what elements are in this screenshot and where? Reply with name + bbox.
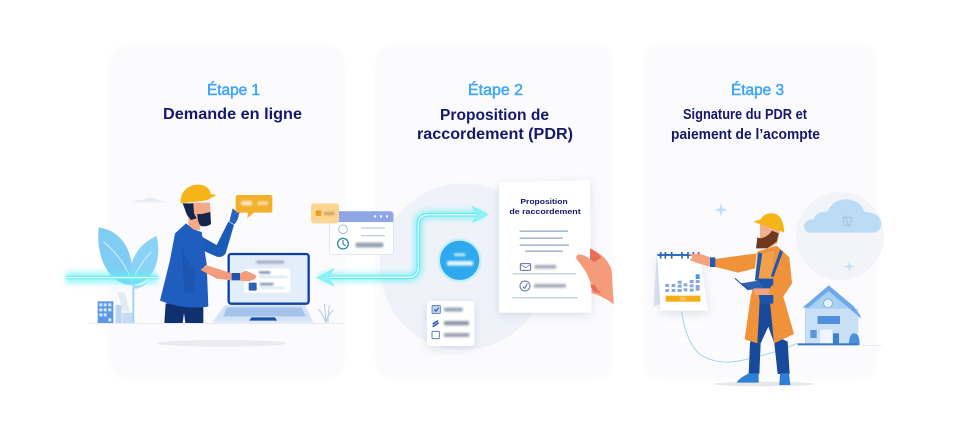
panel: step 3 card bbox=[642, 44, 878, 380]
arrow: cyan line left bbox=[66, 272, 158, 283]
illustration: step 1 scene bbox=[66, 185, 345, 347]
icon: buildings bbox=[98, 293, 132, 323]
icon: reeds bbox=[319, 304, 333, 323]
speech bubble bbox=[236, 195, 272, 218]
document: de raccordement bbox=[509, 207, 581, 216]
boots bbox=[737, 373, 790, 385]
hat bbox=[753, 213, 784, 233]
heading: step 1: Demande en ligne bbox=[163, 106, 302, 123]
head bbox=[192, 203, 211, 225]
hand back bbox=[589, 248, 614, 304]
background circle bbox=[380, 183, 547, 350]
illustration: step 3 scene bbox=[653, 192, 884, 386]
heading: step 2: Étape 2 bbox=[468, 80, 523, 99]
heading: step 1: Étape 1 bbox=[207, 80, 260, 99]
hand bbox=[576, 248, 603, 293]
cable bbox=[682, 312, 797, 362]
heading: step 1 bbox=[163, 80, 302, 123]
shirt and overalls bbox=[757, 251, 774, 280]
calendar bbox=[653, 252, 708, 311]
ground shadow bbox=[157, 340, 287, 347]
ground shadow bbox=[714, 382, 814, 386]
laptop bbox=[213, 254, 313, 323]
panel: step 1 card bbox=[108, 44, 345, 380]
pointing arm bbox=[714, 253, 757, 273]
heading: step 3: Étape 3 bbox=[731, 80, 784, 99]
tablet bbox=[741, 281, 764, 290]
small cloud bbox=[132, 197, 166, 202]
ground line bbox=[88, 322, 345, 325]
cloud circle bbox=[796, 192, 884, 280]
status window bbox=[329, 211, 393, 255]
body bbox=[160, 223, 208, 308]
heading: step 3: paiement de l’acompte bbox=[671, 127, 820, 143]
coat bbox=[745, 246, 794, 343]
orange tag bbox=[311, 203, 339, 223]
icon: plant bbox=[98, 227, 158, 323]
worker 1 bbox=[160, 185, 257, 323]
blue badge bbox=[438, 238, 482, 282]
heading: step 3 bbox=[671, 80, 820, 143]
heading: step 2: raccordement (PDR) bbox=[417, 126, 573, 143]
forearm bbox=[201, 265, 232, 280]
raised arm bbox=[202, 222, 234, 257]
document bbox=[499, 180, 592, 313]
heading: step 3: Signature du PDR et bbox=[683, 107, 807, 123]
legs bbox=[164, 303, 203, 323]
heading: step 2: Proposition de bbox=[440, 107, 549, 124]
checklist card bbox=[427, 301, 474, 346]
sparkles bbox=[714, 203, 855, 272]
document title: Proposition bbox=[520, 197, 568, 206]
illustration: step 2 scene bbox=[311, 180, 614, 350]
house bbox=[798, 285, 861, 345]
neck bbox=[188, 217, 200, 230]
trousers bbox=[749, 293, 790, 374]
heading: step 2 bbox=[417, 80, 573, 143]
head bbox=[760, 224, 780, 248]
lower arm bbox=[753, 288, 775, 295]
icon: cloud bbox=[804, 199, 881, 233]
worker 2 bbox=[688, 213, 794, 385]
ground line bbox=[798, 344, 882, 347]
panel: step 2 card bbox=[375, 44, 614, 380]
arrow: glowing connector bbox=[317, 207, 488, 285]
hat bbox=[181, 185, 217, 203]
